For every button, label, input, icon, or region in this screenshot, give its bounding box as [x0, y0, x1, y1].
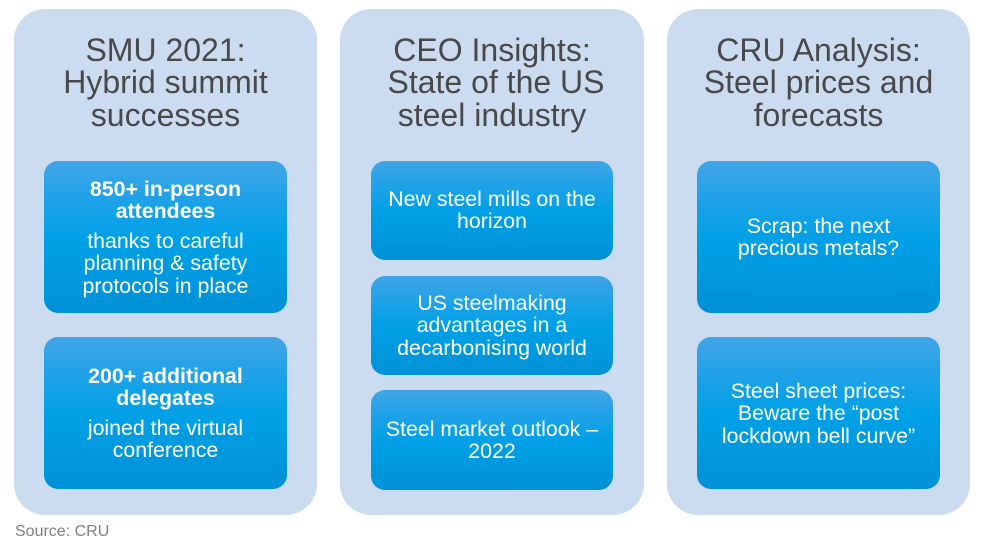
- text: steel market outlook: 2022: [468, 439, 516, 463]
- heading: CEO Insights: [387, 32, 604, 133]
- text: scrap: [738, 214, 899, 260]
- box: steel market outlook: [371, 390, 613, 490]
- heading: SMU 2021: successes: [91, 97, 240, 133]
- heading: SMU 2021: [63, 32, 268, 133]
- heading: CRU Analysis: Steel prices and: [704, 64, 933, 100]
- text: thanks to careful planning: [82, 229, 248, 298]
- text: steel market outlook: Steel market outlook –: [386, 417, 598, 441]
- bold text: 200+ additional delegates: [88, 364, 243, 410]
- panel: SMU 2021: [14, 9, 317, 515]
- bold text: 850+ in-person attendees: attendees: [116, 199, 215, 223]
- text: new steel mills: horizon: [457, 209, 527, 233]
- box: US steelmaking advantages: [371, 276, 613, 375]
- text: US steelmaking advantages: advantages in a: [417, 313, 567, 337]
- heading: CEO Insights: State of the US: [387, 64, 604, 100]
- heading: SMU 2021: SMU 2021:: [85, 32, 246, 68]
- text: US steelmaking advantages: [397, 291, 587, 360]
- bold text: 850+ in-person attendees: [90, 177, 241, 223]
- heading: CRU Analysis: [704, 32, 933, 133]
- box: in-person attendees: [44, 161, 287, 313]
- text: steel sheet prices: Beware the “post: [738, 401, 899, 425]
- text: US steelmaking advantages: decarbonising world: [397, 336, 587, 360]
- panel: CEO Insights: [340, 9, 644, 515]
- bold text: 200+ additional delegates: delegates: [116, 386, 215, 410]
- text: joined the virtual conference: [87, 416, 243, 462]
- text: steel market outlook: [386, 417, 598, 463]
- text: steel sheet prices: lockdown bell curve”: [722, 424, 915, 448]
- box: additional delegates: [44, 337, 287, 489]
- box: scrap: [697, 161, 940, 313]
- panel: CRU Analysis: [667, 9, 970, 515]
- text: steel sheet prices: Steel sheet prices:: [731, 379, 906, 403]
- text: joined the virtual conference: conference: [113, 438, 218, 462]
- text: scrap: precious metals?: [738, 236, 899, 260]
- heading: CEO Insights: steel industry: [398, 97, 586, 133]
- text: scrap: Scrap: the next: [747, 214, 890, 238]
- text: new steel mills: [388, 187, 596, 233]
- text: US steelmaking advantages: US steelmaking: [417, 291, 567, 315]
- bold text: 200+ additional delegates: 200+ additional: [88, 364, 243, 388]
- text: thanks to careful planning: planning & safety: [84, 251, 247, 275]
- heading: CRU Analysis: CRU Analysis:: [716, 32, 921, 68]
- bold text: 850+ in-person attendees: 850+ in-person: [90, 177, 241, 201]
- source note: Source: CRU: [15, 523, 109, 540]
- heading: CRU Analysis: forecasts: [754, 97, 883, 133]
- box: new steel mills: [371, 161, 613, 260]
- heading: SMU 2021: Hybrid summit: [63, 64, 268, 100]
- box: steel sheet prices: [697, 337, 940, 489]
- text: thanks to careful planning: thanks to careful: [87, 229, 244, 253]
- text: thanks to careful planning: protocols in place: [82, 274, 248, 298]
- text: new steel mills: New steel mills on the: [388, 187, 596, 211]
- text: joined the virtual conference: joined the virtual: [88, 416, 243, 440]
- heading: CEO Insights: CEO Insights:: [393, 32, 591, 68]
- text: steel sheet prices: [722, 379, 915, 448]
